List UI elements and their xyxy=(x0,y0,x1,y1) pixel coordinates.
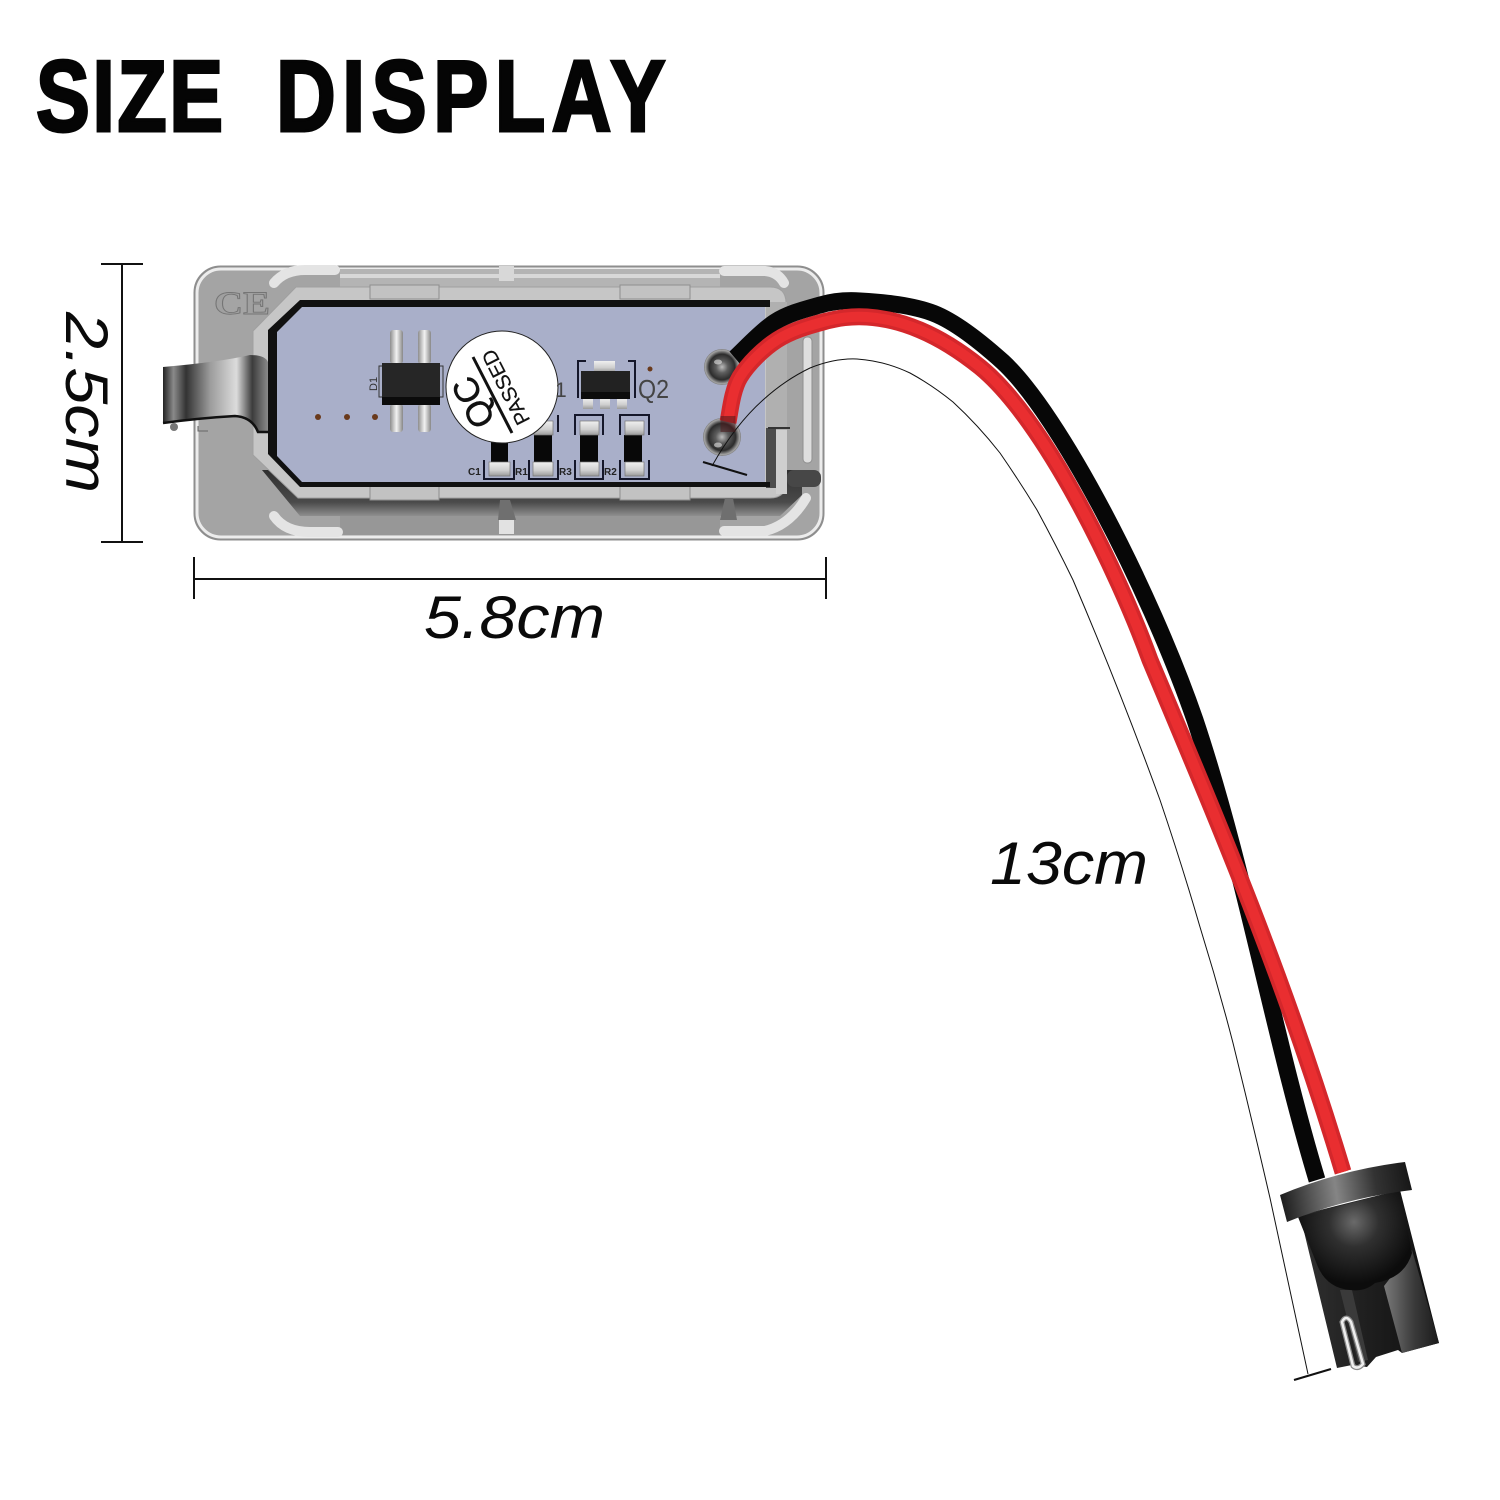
connector dome xyxy=(1298,1190,1412,1290)
QC passed sticker xyxy=(444,331,567,443)
width dimension line xyxy=(194,557,826,599)
right side slot xyxy=(766,302,821,494)
black wire xyxy=(735,301,1317,1180)
connector base xyxy=(1300,1190,1439,1368)
wire length measure curve xyxy=(712,359,1308,1374)
frame tabs xyxy=(370,285,690,500)
PCB board xyxy=(277,307,765,482)
component D1: D1 xyxy=(368,377,380,391)
spring contact xyxy=(1342,1318,1363,1368)
CE mark: CE xyxy=(214,286,270,322)
measure end ticks xyxy=(703,462,1331,1380)
component Q2: Q2 xyxy=(638,374,669,404)
height dimension line xyxy=(101,264,143,542)
title: DISPLAY xyxy=(276,39,666,153)
corner clips xyxy=(274,270,806,532)
title xyxy=(36,39,666,153)
resistors row: R3 xyxy=(559,467,572,478)
QC passed sticker: PASSED xyxy=(477,345,535,429)
QC passed sticker: 1 xyxy=(555,379,567,402)
resistors row: C1 xyxy=(468,467,481,478)
solder dots xyxy=(315,414,378,420)
component D1 xyxy=(368,330,443,432)
resistors row xyxy=(468,415,649,479)
PCB recess xyxy=(268,300,770,487)
spring clip xyxy=(163,355,268,432)
terminal screws xyxy=(703,349,741,456)
height label: 2.5cm xyxy=(53,311,120,493)
light housing xyxy=(163,266,824,540)
wire length label: 13cm xyxy=(990,830,1148,897)
red wire xyxy=(728,317,1343,1172)
QC passed sticker: QC xyxy=(444,370,503,434)
inner frame xyxy=(253,287,786,498)
title: SIZE xyxy=(36,40,223,153)
recessed shadow band xyxy=(262,470,802,516)
resistors row: R2 xyxy=(604,467,617,478)
width label: 5.8cm xyxy=(424,584,605,651)
T10 connector xyxy=(1280,1162,1439,1368)
component Q2 xyxy=(578,361,669,409)
resistors row: R1 xyxy=(515,467,528,478)
top and bottom notches xyxy=(498,266,737,534)
connector flange xyxy=(1280,1162,1412,1222)
housing shell xyxy=(194,266,824,540)
